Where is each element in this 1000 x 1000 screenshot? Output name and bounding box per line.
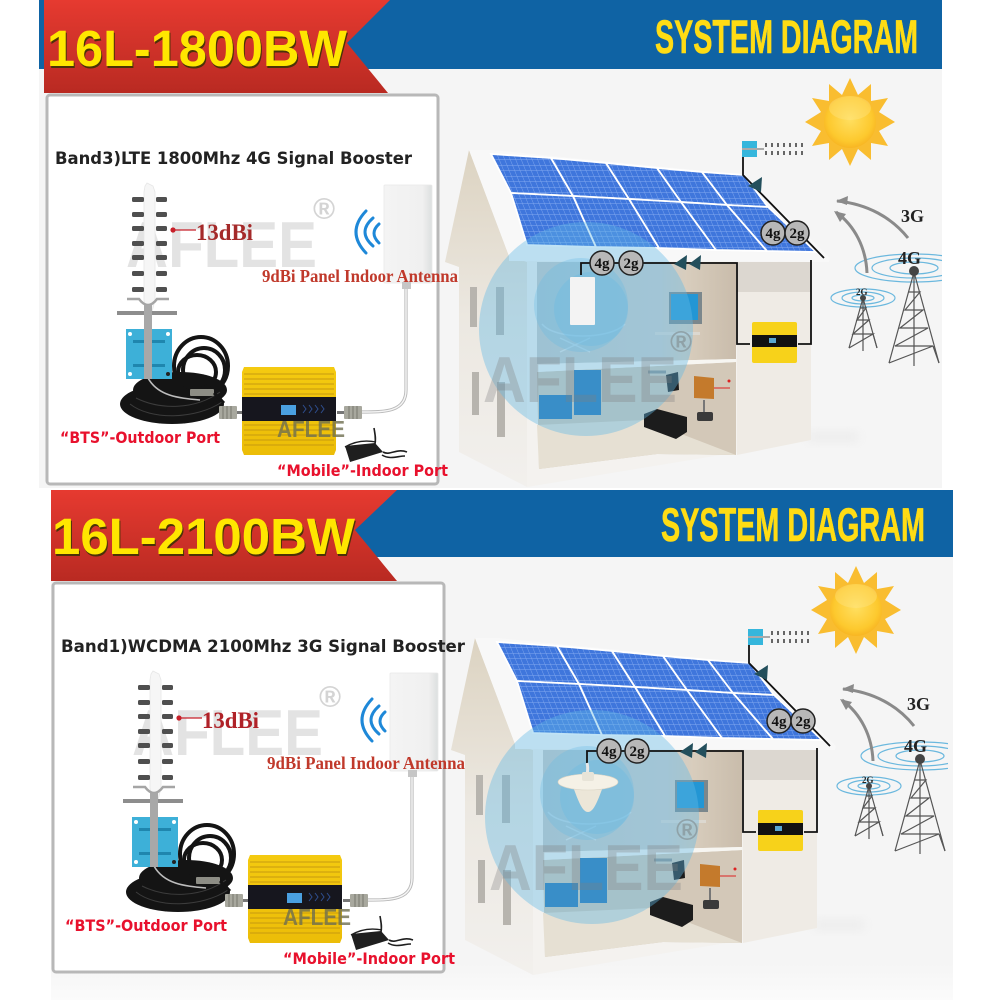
icon: booster in house [758,810,803,851]
section 2 model title: 16L-2100BW [52,508,356,565]
coax cable [362,285,406,412]
indoor band badges: 2g [624,256,639,272]
icon: roof antenna [748,629,809,645]
panel: section 2 product kit [53,583,466,972]
wiring [587,643,830,832]
roof band badges: 4g [772,714,787,730]
2G label: 2G [856,287,868,297]
coax cable [368,773,412,900]
product heading: Band1)WCDMA 2100Mhz 3G Signal Booster [61,637,466,657]
panel antenna label: 9dBi Panel Indoor Antenna [262,266,458,286]
icon: sun [805,78,895,166]
house building with solar roof [445,150,858,487]
icon: indoor panel antenna [570,277,595,325]
section 2 diagram [451,566,979,975]
indoor port label: “Mobile”-Indoor Port [283,949,455,968]
icon: booster in house [752,322,797,363]
watermark: AFLEE [132,696,323,769]
3G label: 3G [907,694,930,714]
icon: sun [811,566,901,654]
icon: yagi antenna [117,183,177,379]
indoor port label: “Mobile”-Indoor Port [277,461,448,480]
indoor band badges: 4g [602,744,617,760]
icon: wireless signal [362,699,385,741]
gain callout [176,708,260,733]
cable coil [120,337,228,424]
section 2 red model ribbon [51,490,397,581]
house watermark registered mark: ® [676,814,698,847]
panel: section 1 product kit [47,95,458,484]
watermark registered mark: ® [319,681,341,714]
panel antenna label: 9dBi Panel Indoor Antenna [267,753,465,773]
product heading: Band3)LTE 1800Mhz 4G Signal Booster [55,149,413,169]
roof band badges: 2g [796,714,811,730]
icon: yagi antenna [123,671,183,867]
icon: panel antenna [384,185,432,289]
booster watermark: AFLEE [283,904,351,930]
cable coil [126,825,234,912]
roof band badges: 2g [790,226,805,242]
roof band badges: 4g [766,226,781,242]
house watermark registered mark: ® [670,326,692,359]
icon: signal direction arrows [674,177,762,270]
icon: power adapter [351,916,413,950]
house building with solar roof [451,638,864,975]
gain callout [170,220,254,245]
section 1 blue header band [39,0,942,69]
icon: cell towers and signal arrows [831,196,973,366]
gain callout: 13dBi [202,708,260,733]
roof band badges [761,221,809,245]
2G label: 2G [862,775,874,785]
icon: wireless signal [356,211,379,253]
outdoor port label: “BTS”-Outdoor Port [60,428,220,447]
icon: cell towers and signal arrows [837,684,979,854]
3G label: 3G [901,206,924,226]
section 2 background [51,550,953,1000]
icon: panel antenna [390,673,438,777]
icon: booster unit [219,367,362,455]
indoor band badges [597,739,649,763]
icon: power adapter [345,428,407,462]
section 2 blue header band [51,490,953,557]
house illustration [445,141,858,487]
watermark registered mark: ® [313,193,335,226]
4G label: 4G [904,736,927,756]
gain callout: 13dBi [196,220,254,245]
wiring [581,155,824,344]
section 1 red model ribbon [44,0,390,93]
icon: signal direction arrows [680,665,768,758]
4G label: 4G [898,248,921,268]
section 1 model title: 16L-1800BW [47,20,348,77]
booster watermark: AFLEE [277,416,345,442]
roof band badges [767,709,815,733]
blue coverage circles [485,710,699,924]
outdoor port label: “BTS”-Outdoor Port [65,916,227,935]
section 1 background [39,60,942,488]
watermark: AFLEE [126,208,317,281]
icon: ceiling dome antenna [558,763,618,812]
indoor band badges: 4g [594,256,610,272]
house watermark: AFLEE [483,343,677,416]
indoor band badges [590,251,643,275]
blue coverage circles [479,222,693,436]
indoor band badges: 2g [630,744,645,760]
icon: booster unit [225,855,368,943]
house watermark: AFLEE [489,831,683,904]
icon: roof antenna [742,141,803,157]
